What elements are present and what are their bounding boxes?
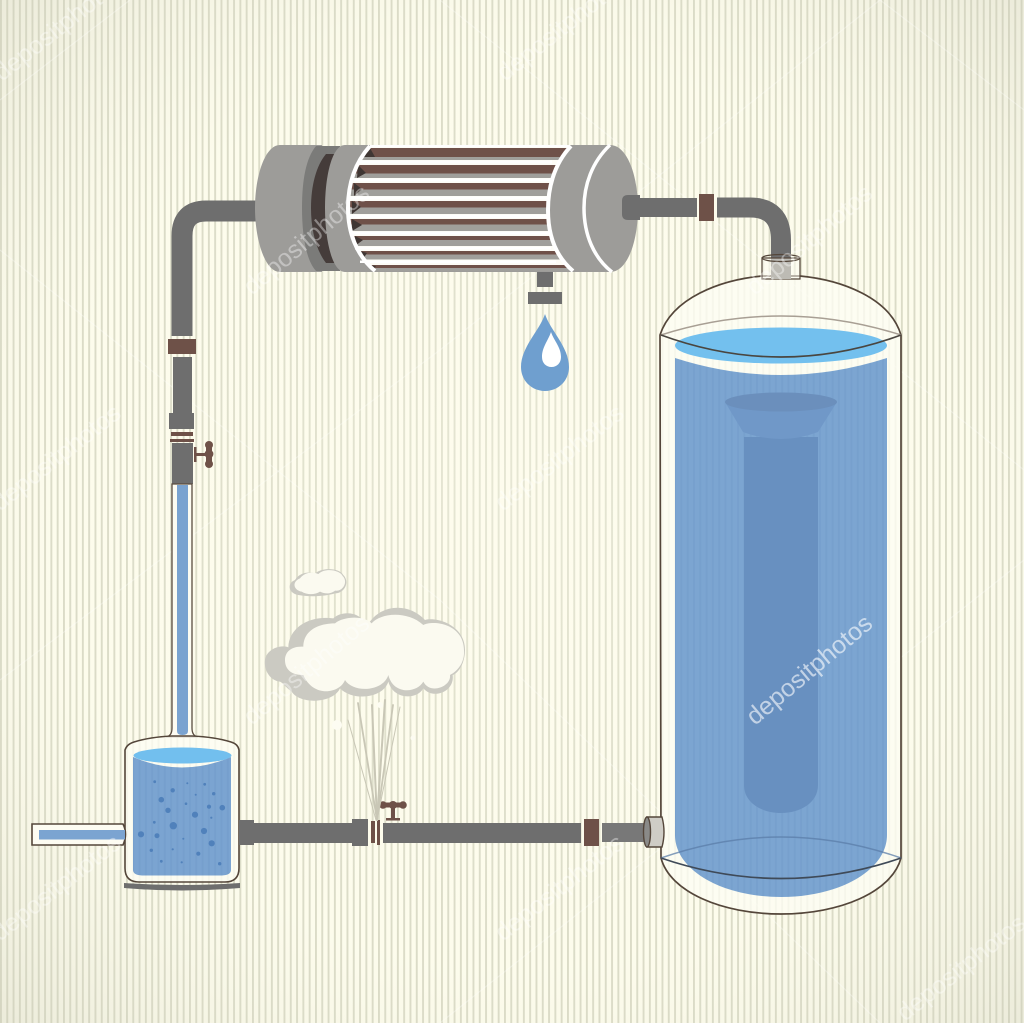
white tube separators (350, 145, 570, 263)
tank shell (660, 276, 901, 914)
tank water surface (134, 748, 232, 764)
watermarks: depositphotos (489, 829, 629, 947)
glass tube with water (166, 484, 198, 737)
tank water body (133, 757, 231, 876)
upper joint (661, 316, 901, 335)
watermarks: depositphotos (741, 179, 878, 301)
big tank (644, 254, 901, 914)
left cap (255, 145, 322, 272)
big cloud (265, 608, 465, 701)
watermarks: depositphotos (741, 609, 878, 731)
icon: water drop (521, 314, 569, 391)
tube bundle (350, 147, 568, 268)
water spray (332, 700, 416, 820)
water body (675, 358, 887, 897)
water surface (675, 328, 887, 364)
pipe: left elbow (182, 211, 256, 336)
icon: valve on vertical pipe (194, 441, 213, 468)
watermarks: depositphotos (238, 179, 375, 301)
pipe: right elbow with flange (622, 194, 781, 264)
heat exchanger (255, 145, 638, 273)
inner tube (744, 437, 818, 813)
white outlines (348, 146, 375, 271)
collar ring (302, 146, 340, 271)
watermarks: depositphotos (238, 609, 375, 731)
cloud shadow (265, 608, 465, 701)
small cloud (290, 569, 346, 596)
tank base (124, 883, 240, 890)
tap below exchanger (528, 272, 562, 304)
icon: valve on bottom pipe (379, 801, 407, 820)
pipe: bottom (239, 819, 644, 846)
main body (325, 145, 638, 272)
small tank (124, 736, 240, 890)
lower joint (661, 837, 901, 858)
bottom coupling (644, 817, 664, 847)
funnel (725, 402, 837, 439)
bubbles (138, 780, 225, 865)
cloud body (285, 615, 464, 691)
pipe: vertical with flanges and valve (168, 339, 213, 484)
watermarks: depositphotos (489, 399, 629, 517)
inlet tube (32, 824, 126, 845)
top neck (762, 254, 800, 279)
